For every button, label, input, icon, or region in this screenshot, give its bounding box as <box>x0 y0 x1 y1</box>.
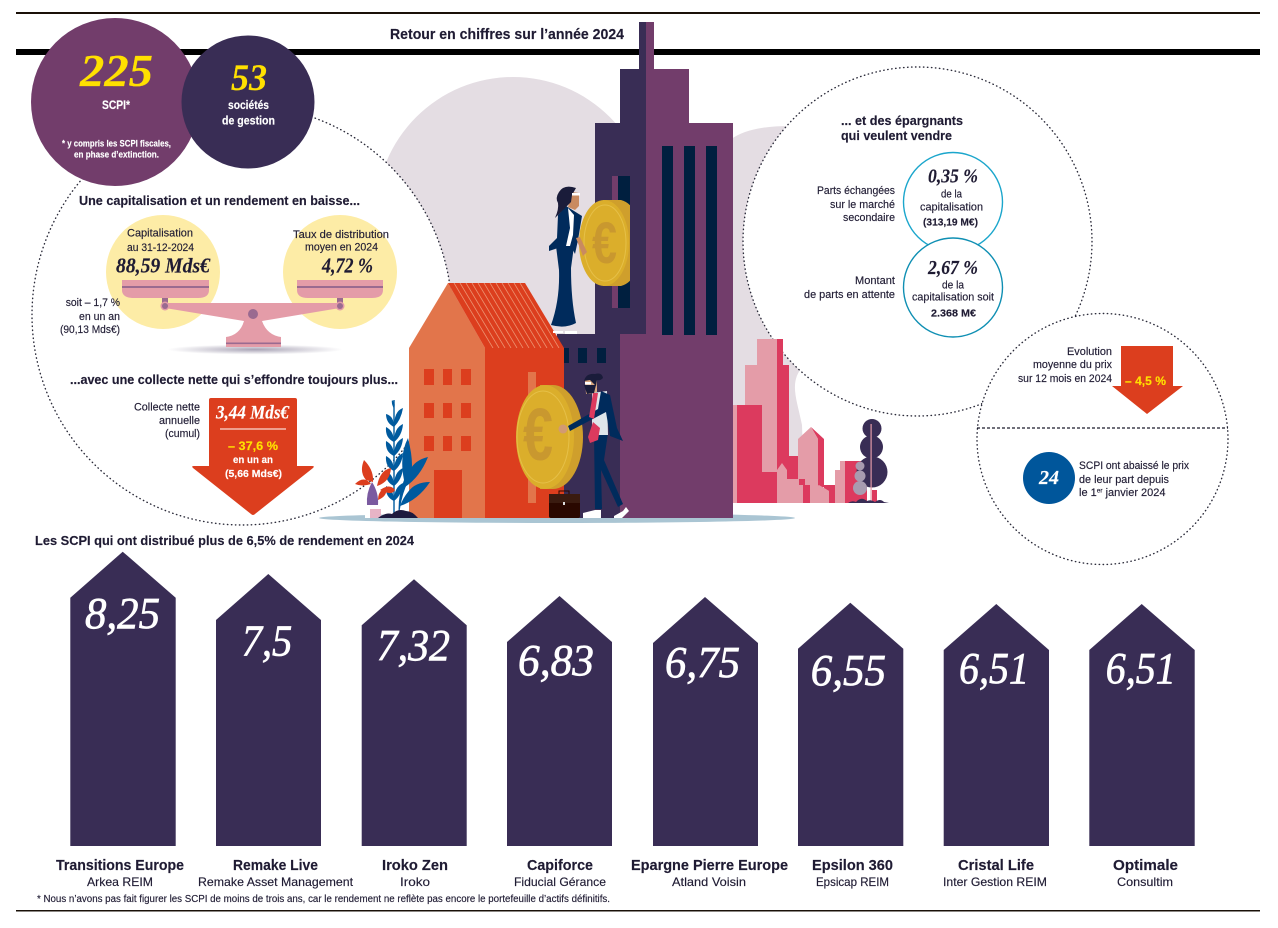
bar: Capiforce: 6,83 <box>518 636 594 685</box>
arrow: collecte down <box>192 398 314 515</box>
text: SCPI ont abaissé <box>1079 460 1189 499</box>
badge: 24 <box>1023 452 1075 504</box>
panel: capitalisation and collecte <box>32 105 452 525</box>
text: SCPI ont abaissé: le 1 <box>1079 487 1097 499</box>
circle: 2,67 %: 2,67 % <box>927 257 978 279</box>
arrow: prix down: – 4,5 % <box>1125 374 1166 388</box>
circle: 2,67 %: 2.368 M€ <box>931 308 976 320</box>
heading: collecte: ...avec une collecte nette qui s’effondre toujours plus... <box>70 372 398 387</box>
bar: Iroko Zen: 7,32 <box>377 621 450 670</box>
badge: 225 SCPI: * y compris les SCPI fiscales, <box>62 138 171 148</box>
text: evolution label: sur 12 mois en 2024 <box>1018 373 1112 385</box>
bar: Transitions Europe <box>56 552 184 889</box>
circle: 2,67 % <box>904 238 1002 337</box>
bar: Cristal Life: Cristal Life <box>958 858 1034 874</box>
text: soit -1,7 % <box>60 297 120 336</box>
background shape: right grey blob <box>730 126 830 456</box>
text: evolution label: moyenne du prix <box>1033 359 1112 371</box>
bar: Capiforce: Fiducial Gérance <box>514 875 606 889</box>
bar: Epsilon 360 <box>798 603 903 889</box>
circle: 0,35 % <box>904 152 1002 252</box>
bar: Cristal Life: 6,51 <box>959 644 1029 693</box>
circle: 0,35 %: capitalisation <box>920 202 983 214</box>
text: collecte nette label: Collecte nette <box>134 402 200 414</box>
bar: Epargne Pierre Europe: Atland Voisin <box>672 875 746 889</box>
text: evolution label: Evolution <box>1067 346 1112 358</box>
bar: Epargne Pierre Europe: Epargne Pierre Europe <box>631 858 788 874</box>
text: parts en attente label <box>804 275 895 301</box>
arrow: collecte down: 3,44 Mds€ <box>215 402 290 424</box>
bar: Transitions Europe: Transitions Europe <box>56 858 184 874</box>
icon: briefcase <box>549 491 580 518</box>
icon: lower euro coin: € <box>523 393 553 476</box>
bar: Optimale: Optimale <box>1113 858 1178 874</box>
text: parts échangées label: secondaire <box>843 212 895 224</box>
circle: 0,35 %: (313,19 M€) <box>923 216 978 228</box>
arrow: collecte down: en un an <box>233 454 273 466</box>
heading: capitalisation: Une capitalisation et un rendement en baisse... <box>79 193 360 208</box>
badge: 53 sociétés de gestion: sociétés <box>228 100 269 112</box>
bar: Transitions Europe: Arkea REIM <box>87 875 153 889</box>
figure: woman pushing coin <box>549 187 587 334</box>
arrow: prix down <box>1112 346 1183 414</box>
illustration: ground <box>319 513 795 523</box>
text: evolution label <box>1018 346 1112 385</box>
bar: Remake Live: Remake Asset Management <box>198 875 354 889</box>
text: SCPI ont abaissé: janvier 2024 <box>1103 487 1166 499</box>
text: SCPI ont abaissé: SCPI ont abaissé le prix <box>1079 460 1189 472</box>
text: parts échangées label: sur le marché <box>830 199 895 211</box>
bar: Remake Live <box>198 574 354 889</box>
heading: épargnants <box>841 113 963 143</box>
badge: 225 SCPI <box>31 18 199 186</box>
bar: Iroko Zen: Iroko Zen <box>382 858 448 874</box>
illustration: plants <box>355 400 430 518</box>
footnote: * Nous n’avons pas fait figurer les SCPI de moins de trois ans, car le rendement ne reflète pas encore le portefeuille d’actifs définitifs. <box>37 894 610 905</box>
bar: Iroko Zen: Iroko <box>400 875 430 889</box>
badge: 53 sociétés de gestion <box>182 36 314 168</box>
bar: Remake Live: 7,5 <box>242 617 292 666</box>
icon: lower euro coin <box>516 385 583 489</box>
yellow disc: capitalisation <box>106 215 220 329</box>
bar: Capiforce: Capiforce <box>527 858 593 874</box>
text: parts échangées label: Parts échangées <box>817 185 895 197</box>
text: taux de distribution value <box>293 229 389 278</box>
badge: 225 SCPI: 225 <box>79 45 153 96</box>
text: soit -1,7 %: (90,13 Mds€) <box>60 324 120 336</box>
badge: 24: 24 <box>1038 467 1059 489</box>
circle: 2,67 %: capitalisation soit <box>912 292 994 304</box>
text: capitalisation value <box>116 228 211 278</box>
text: SCPI ont abaissé: de leur part depuis <box>1079 474 1169 486</box>
panel: épargnants <box>743 67 1092 416</box>
illustration: trees <box>848 419 889 503</box>
bar: Epsilon 360: Epsicap REIM <box>816 875 889 889</box>
text: capitalisation value: 88,59 Mds€ <box>116 254 211 278</box>
text: taux de distribution value: 4,72 % <box>321 254 373 278</box>
heading: épargnants: qui veulent vendre <box>841 128 952 143</box>
heading: épargnants: ... et des épargnants <box>841 113 963 128</box>
bar: Epargne Pierre Europe: 6,75 <box>665 638 740 687</box>
bar: Optimale: 6,51 <box>1106 644 1176 693</box>
text: parts en attente label: Montant <box>855 275 895 287</box>
figure: man pushing coin <box>558 374 629 518</box>
title: Retour en chiffres sur l’année 2024 <box>390 27 624 43</box>
text: collecte nette label: (cumul) <box>165 428 200 440</box>
illustration: tower <box>557 22 733 518</box>
text: soit -1,7 %: soit – 1,7 % <box>66 297 120 309</box>
bar: Epargne Pierre Europe <box>631 597 788 889</box>
circle: 2,67 %: de la <box>942 280 965 292</box>
text: capitalisation value: au 31-12-2024 <box>127 242 194 254</box>
illustration: house <box>409 283 564 518</box>
text: parts échangées label <box>817 185 895 224</box>
bar: Capiforce <box>507 596 612 889</box>
text: collecte nette label: annuelle <box>159 415 200 427</box>
bar: Cristal Life: Inter Gestion REIM <box>943 875 1047 889</box>
bar: Remake Live: Remake Live <box>233 858 318 874</box>
bar: Optimale: Consultim <box>1117 875 1173 889</box>
icon: upper euro coin <box>579 200 630 286</box>
text: capitalisation value: Capitalisation <box>127 228 193 240</box>
bar: Transitions Europe: 8,25 <box>85 589 160 638</box>
bar: Iroko Zen <box>362 579 467 889</box>
bar: Epsilon 360: 6,55 <box>811 646 886 695</box>
text: soit -1,7 %: en un an <box>79 311 120 323</box>
badge: 225 SCPI: SCPI* <box>102 100 130 112</box>
badge: 53 sociétés de gestion: de gestion <box>222 116 275 128</box>
panel: évolution du prix <box>977 314 1228 564</box>
bar: Epsilon 360: Epsilon 360 <box>812 858 893 874</box>
arrow: collecte down: (5,66 Mds€) <box>225 468 282 480</box>
bar: Cristal Life <box>943 604 1049 889</box>
illustration: pink skyline <box>733 339 877 503</box>
bar: Optimale <box>1089 604 1195 889</box>
text: collecte nette label <box>134 402 200 440</box>
circle: 0,35 %: 0,35 % <box>928 166 978 188</box>
badge: 225 SCPI: en phase d’extinction. <box>74 150 159 160</box>
yellow disc: taux de distribution <box>283 215 397 329</box>
text: SCPI ont abaissé: er <box>1097 488 1103 494</box>
text: taux de distribution value: Taux de distribution <box>293 229 389 241</box>
icon: upper euro coin: € <box>592 211 617 276</box>
background shape: large grey blob <box>376 77 650 340</box>
text: parts en attente label: de parts en attente <box>804 289 895 301</box>
icon: balance scale <box>122 280 383 354</box>
circle: 0,35 %: de la <box>941 188 963 200</box>
arrow: collecte down: – 37,6 % <box>228 439 278 453</box>
heading: bar chart: Les SCPI qui ont distribué plus de 6,5% de rendement en 2024 <box>35 533 415 548</box>
badge: 53 sociétés de gestion: 53 <box>231 58 267 99</box>
text: taux de distribution value: moyen en 2024 <box>305 242 378 254</box>
